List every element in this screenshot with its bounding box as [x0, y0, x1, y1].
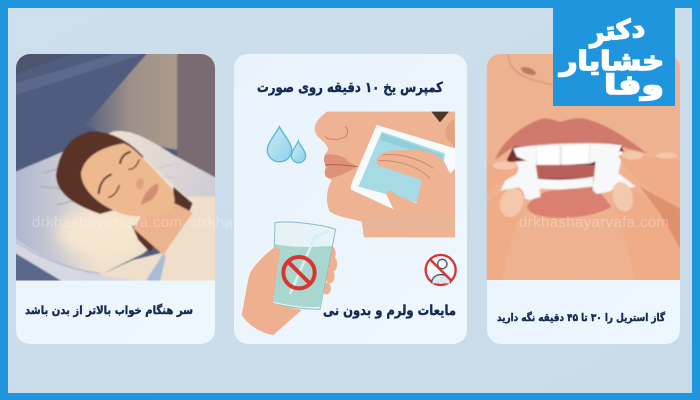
logo text: دکتر	[585, 13, 646, 49]
icon: water drops	[267, 127, 306, 163]
logo text: وفا	[604, 70, 664, 101]
watermark: drkha	[193, 214, 234, 231]
caption: lukewarm fluids: مایعات ولرم و بدون نی	[323, 303, 456, 319]
illustration: face with ice pack	[315, 112, 455, 237]
logo	[553, 8, 675, 106]
icon: no spitting sign	[426, 255, 456, 285]
caption: sleep: سر هنگام خواب بالاتر از بدن باشد	[25, 303, 193, 318]
panel: ice compress and lukewarm fluids	[234, 54, 467, 344]
watermark: khashayarva	[362, 214, 456, 231]
heading: ice compress: کمپرس یخ ۱۰ دقیقه روی صورت	[257, 80, 444, 96]
icon: no straw sign	[283, 257, 315, 288]
caption: gauze: گاز استریل را ۳۰ تا ۴۵ دقیقه نگه دارید	[497, 311, 666, 324]
illustration: biting sterile gauze	[484, 51, 683, 283]
panel: sterile gauze	[484, 51, 683, 344]
watermark: drkhashayarvafa.com	[519, 214, 669, 231]
watermark	[32, 214, 669, 231]
watermark: drkhashayarvafa.com	[32, 214, 182, 231]
logo text: خشایار	[558, 47, 664, 77]
illustration: woman sleeping on pillow	[13, 52, 217, 282]
panel: sleeping with head elevated	[13, 52, 217, 344]
illustration: hand holding glass with straw	[242, 222, 337, 335]
logo text	[558, 13, 664, 101]
